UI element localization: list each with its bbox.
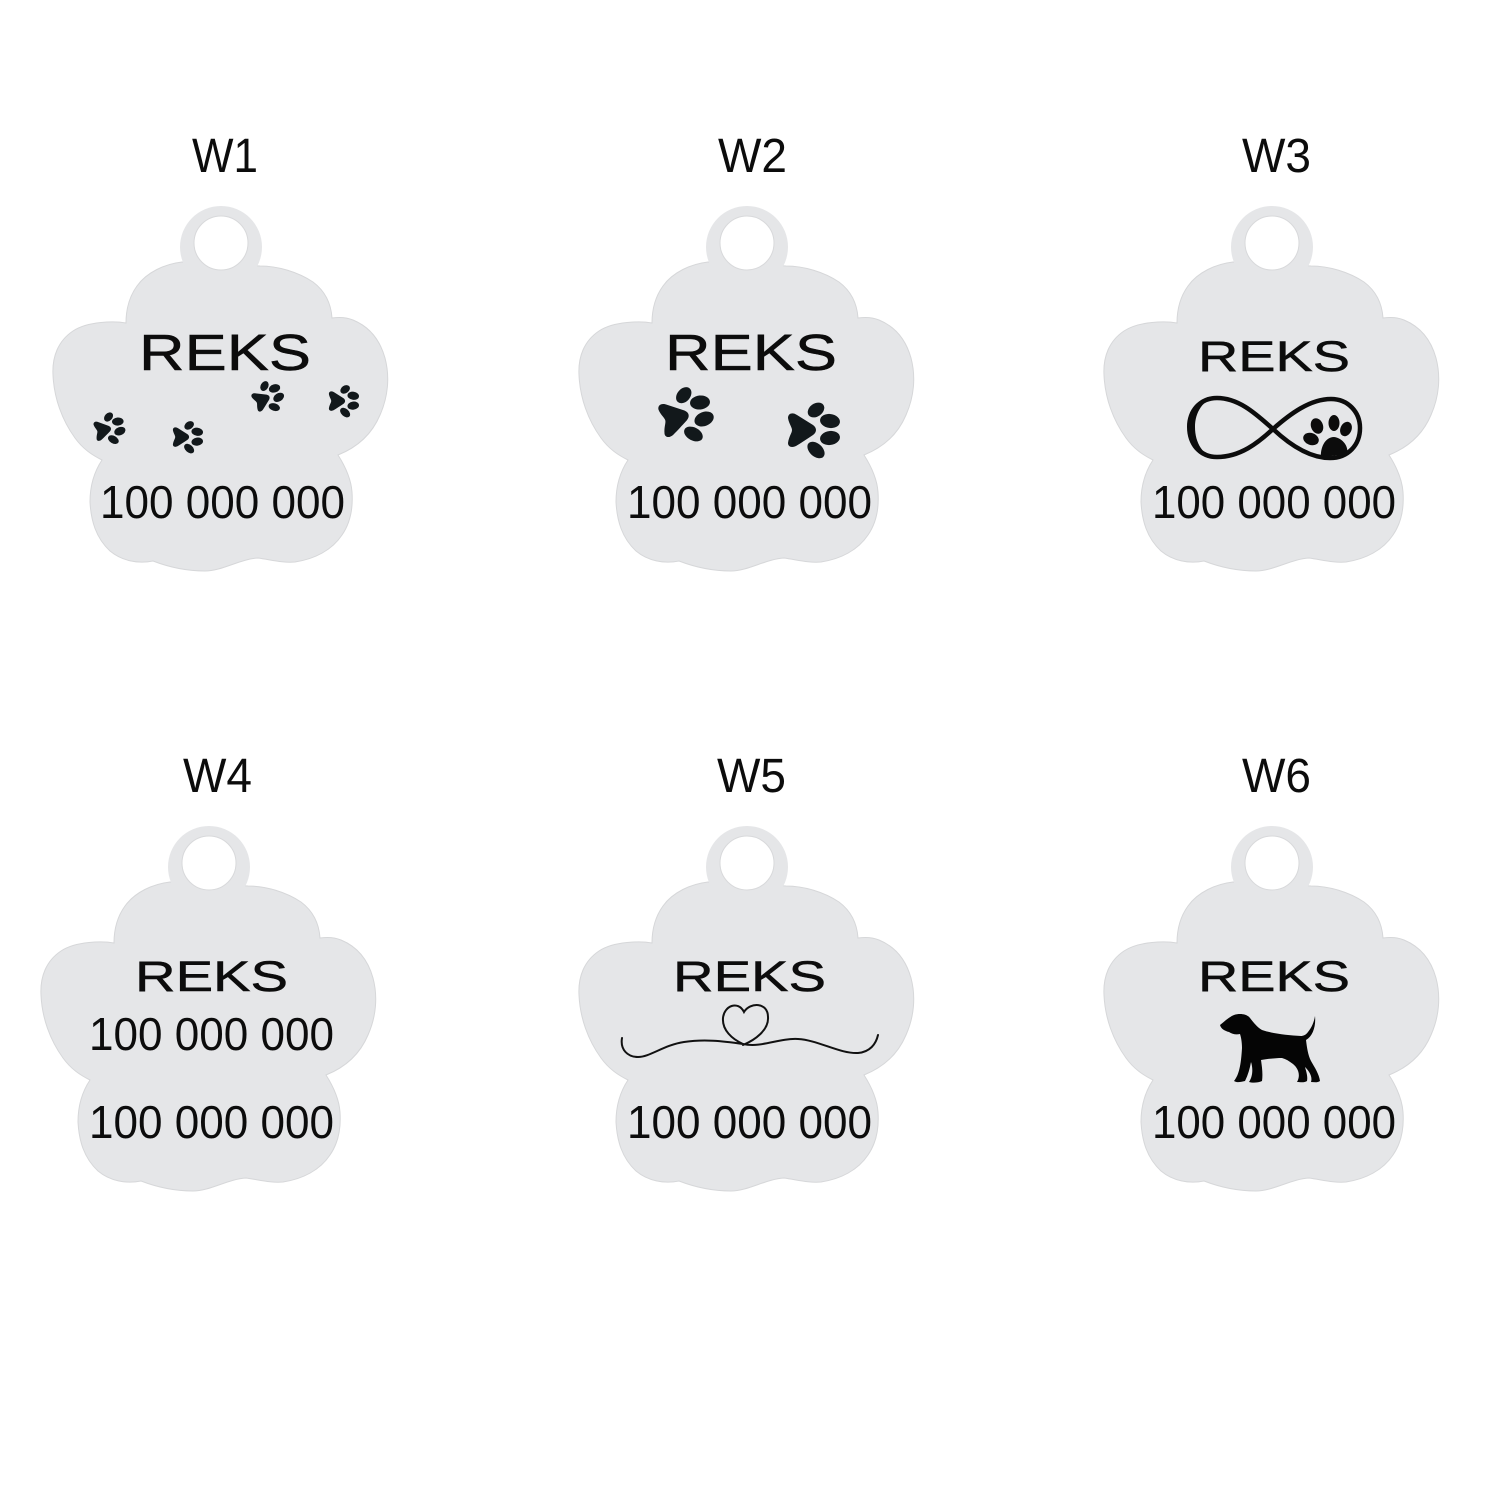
phone number: 100 000 000 (100, 476, 345, 528)
phone number: 100 000 000 (1152, 476, 1396, 528)
label W3: W3 (1242, 130, 1311, 183)
label W6: W6 (1242, 750, 1311, 803)
tag W6 (1104, 750, 1439, 1191)
paw-shaped metal tag (579, 826, 914, 1191)
phone number: 100 000 000 (627, 1096, 872, 1148)
paw-shaped metal tag (1104, 206, 1439, 571)
paw-shaped metal tag (41, 826, 376, 1191)
icon: dog silhouette (1220, 1014, 1320, 1083)
second phone number: 100 000 000 (89, 1096, 334, 1148)
label W5: W5 (717, 750, 786, 803)
label W2: W2 (718, 130, 787, 183)
name: REKS (1198, 333, 1350, 381)
name: REKS (1198, 953, 1350, 1001)
phone number: 100 000 000 (1152, 1096, 1396, 1148)
icon: heart flourish line (622, 1005, 878, 1057)
label W1: W1 (192, 130, 258, 183)
phone number: 100 000 000 (627, 476, 872, 528)
tag W3 (1104, 130, 1439, 571)
label W4: W4 (183, 750, 252, 803)
paw-shaped metal tag (1104, 826, 1439, 1191)
paw-shaped metal tag (53, 206, 388, 571)
tag W4 (41, 750, 376, 1191)
icon: infinity with paw (1187, 396, 1360, 459)
tag W1 (53, 130, 388, 571)
name: REKS (135, 953, 288, 1001)
paw-shaped metal tag (579, 206, 914, 571)
first phone number: 100 000 000 (89, 1008, 334, 1060)
name: REKS (673, 953, 826, 1001)
tag W5 (579, 750, 914, 1191)
tag W2 (579, 130, 914, 571)
name: REKS (139, 324, 311, 381)
icons: two large paws (654, 379, 841, 462)
name: REKS (665, 324, 837, 381)
icons: four small paws (91, 374, 360, 455)
